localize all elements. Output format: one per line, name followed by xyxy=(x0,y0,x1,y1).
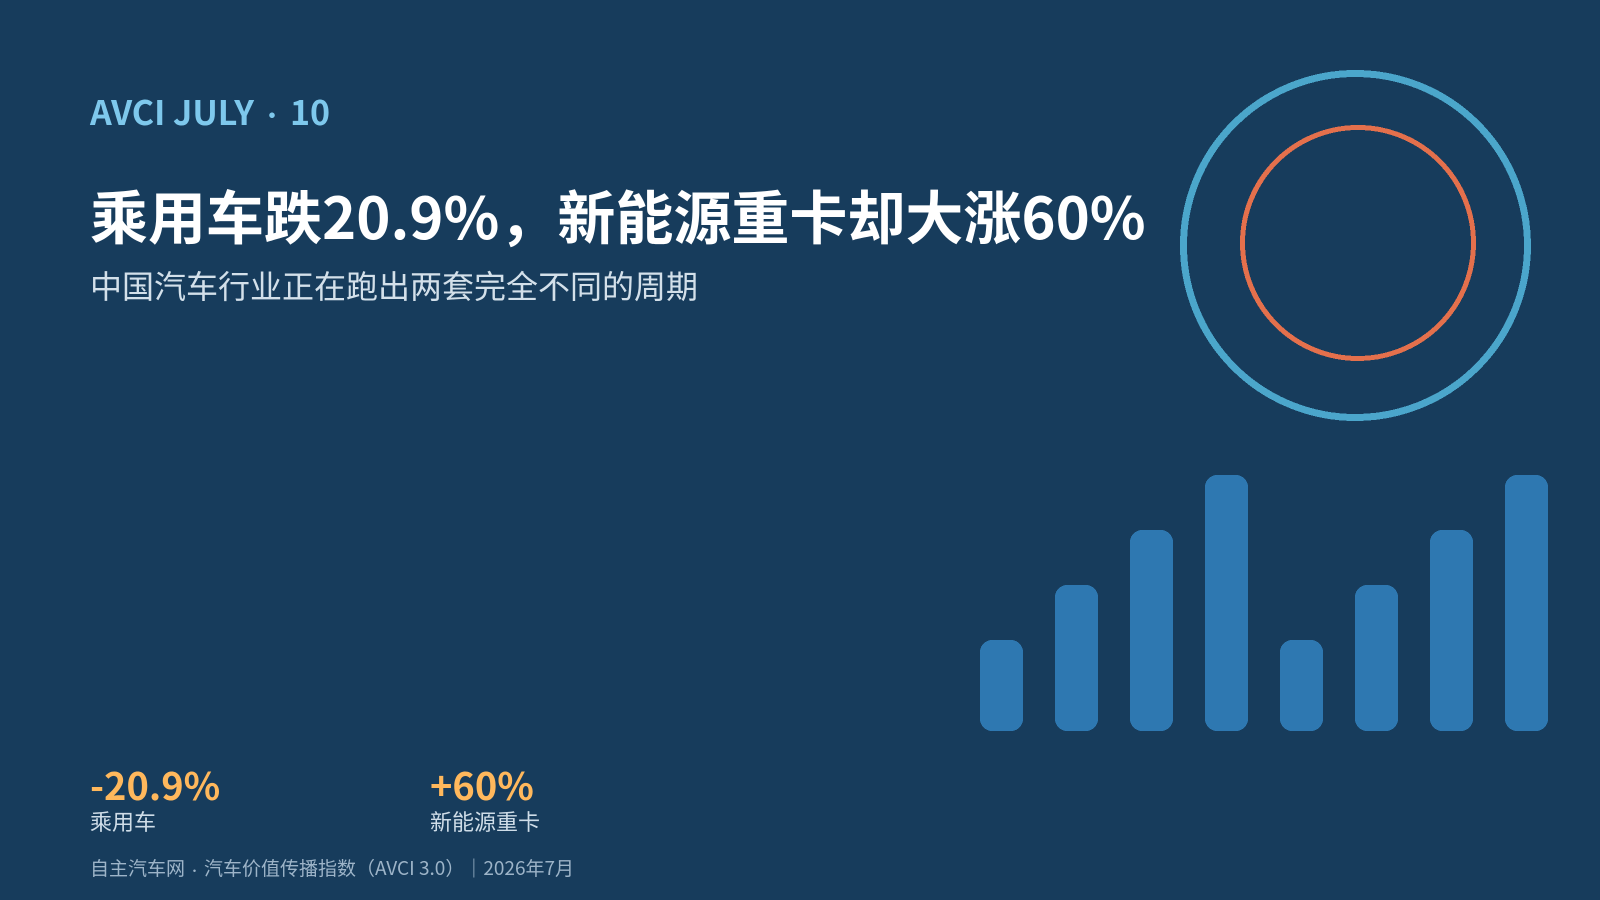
stat: new-energy heavy trucks xyxy=(430,756,540,837)
kicker: AVCI JULY 10 xyxy=(90,86,330,135)
stat value: -20.9% xyxy=(90,756,220,811)
kicker: · xyxy=(259,96,285,133)
source footer: 自主汽车网 汽车价值传播指数（AVCI 3.0）｜2026年7月 xyxy=(90,854,574,881)
subtitle: 中国汽车行业正在跑出两套完全不同的周期 xyxy=(90,262,698,308)
stat: passenger cars xyxy=(90,756,220,837)
stat label: 新能源重卡 xyxy=(430,805,540,837)
title: 乘用车跌20.9%，新能源重卡却大涨60% xyxy=(90,172,1146,256)
stat value: +60% xyxy=(430,756,534,811)
stat label: 乘用车 xyxy=(90,805,156,837)
source footer: · xyxy=(188,862,201,879)
